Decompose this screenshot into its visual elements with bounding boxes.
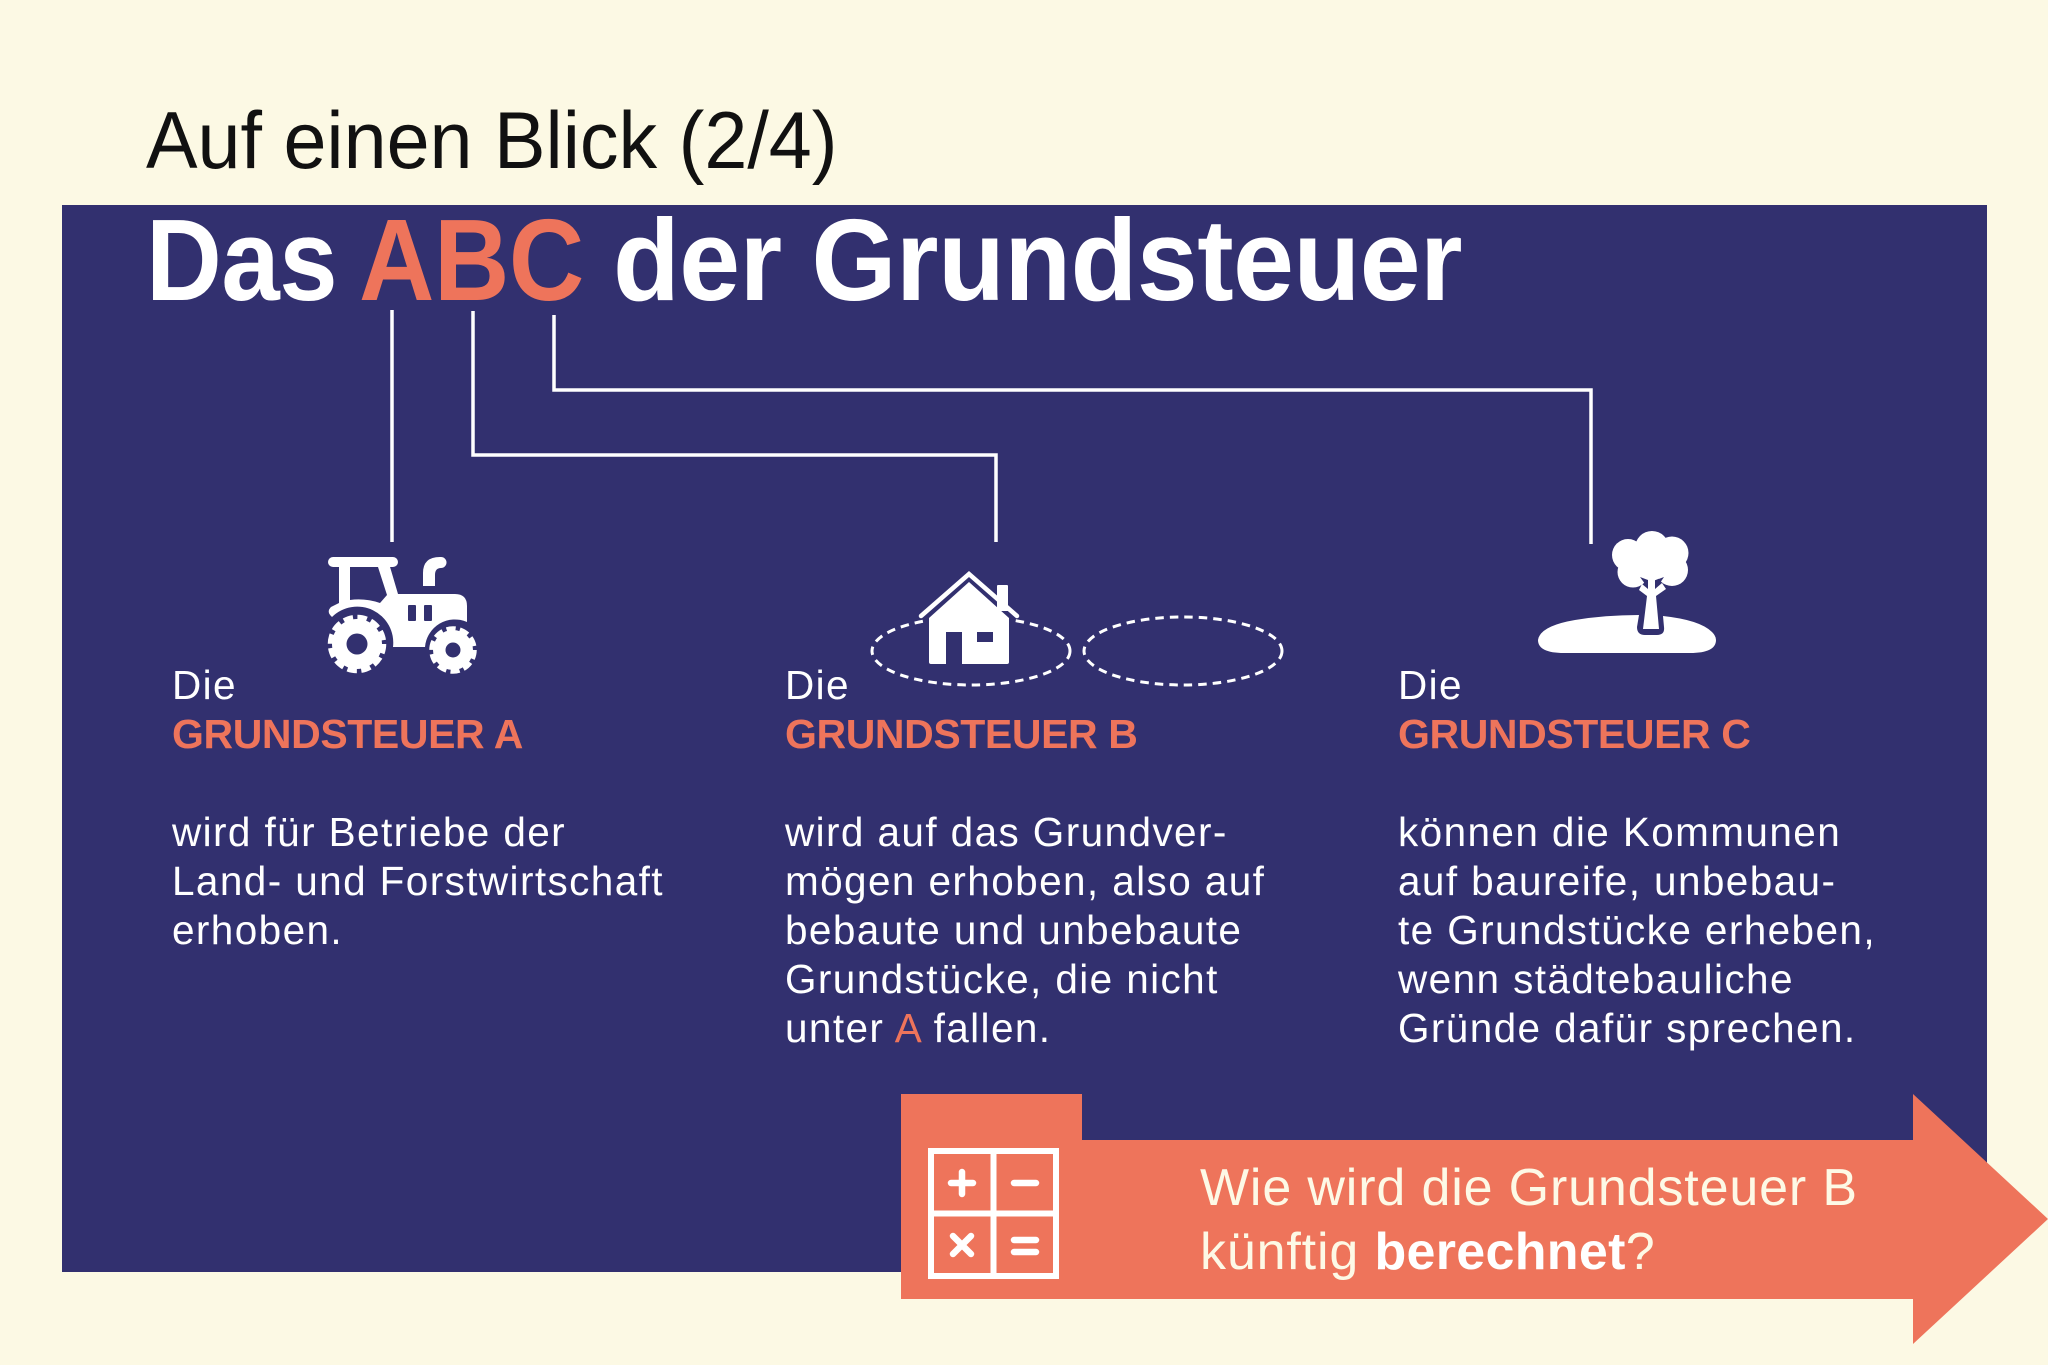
column B text (784, 662, 1265, 1051)
label: Die: Die (172, 662, 237, 708)
callout text: Wie wird die Grundsteuer B (1200, 1159, 1858, 1217)
description A: erhoben. (172, 907, 343, 953)
column C text (1398, 662, 1876, 1051)
description C (1398, 809, 1876, 1051)
description C: wenn städtebauliche (1398, 956, 1794, 1002)
connector: C (554, 315, 1591, 544)
icon: tractor (328, 557, 474, 671)
description B: bebaute und unbebaute (785, 907, 1242, 953)
description A (172, 809, 664, 953)
description B: unter A fallen. (785, 1005, 1051, 1051)
description C: te Grundstücke erheben, (1398, 907, 1876, 953)
label: Die: Die (785, 662, 850, 708)
connector: A (390, 310, 394, 542)
description B: mögen erhoben, also auf (785, 858, 1265, 904)
column A text (172, 662, 664, 953)
callout text: künftig berechnet? (1200, 1223, 1655, 1281)
description B: wird auf das Grundver- (785, 809, 1228, 855)
icon: house on dashed plots (872, 574, 1282, 685)
description A: Land- und Forstwirtschaft (172, 858, 664, 904)
description C: auf baureife, unbebau- (1398, 858, 1836, 904)
icon: tree on land (1538, 531, 1716, 653)
description B (784, 809, 1265, 1051)
description C: können die Kommunen (1398, 809, 1841, 855)
description A: wird für Betriebe der (172, 809, 566, 855)
label: Grundsteuer B: GRUNDSTEUER B (785, 711, 1137, 757)
description B: Grundstücke, die nicht (785, 956, 1219, 1002)
callout text (1200, 1159, 1858, 1281)
description C: Gründe dafür sprechen. (1398, 1005, 1857, 1051)
main heading (146, 195, 1462, 325)
connector: B (473, 311, 996, 542)
icon: calculator (931, 1151, 1056, 1276)
main heading: Das (146, 195, 337, 325)
panel: navy background (62, 205, 1987, 1272)
main heading: ABC (359, 195, 584, 325)
main heading: der Grundsteuer (613, 195, 1462, 325)
supertitle: Auf einen Blick (2/4) (146, 96, 838, 186)
label: Grundsteuer C: GRUNDSTEUER C (1398, 711, 1750, 757)
label: Die: Die (1398, 662, 1463, 708)
label: Grundsteuer A: GRUNDSTEUER A (172, 711, 523, 757)
